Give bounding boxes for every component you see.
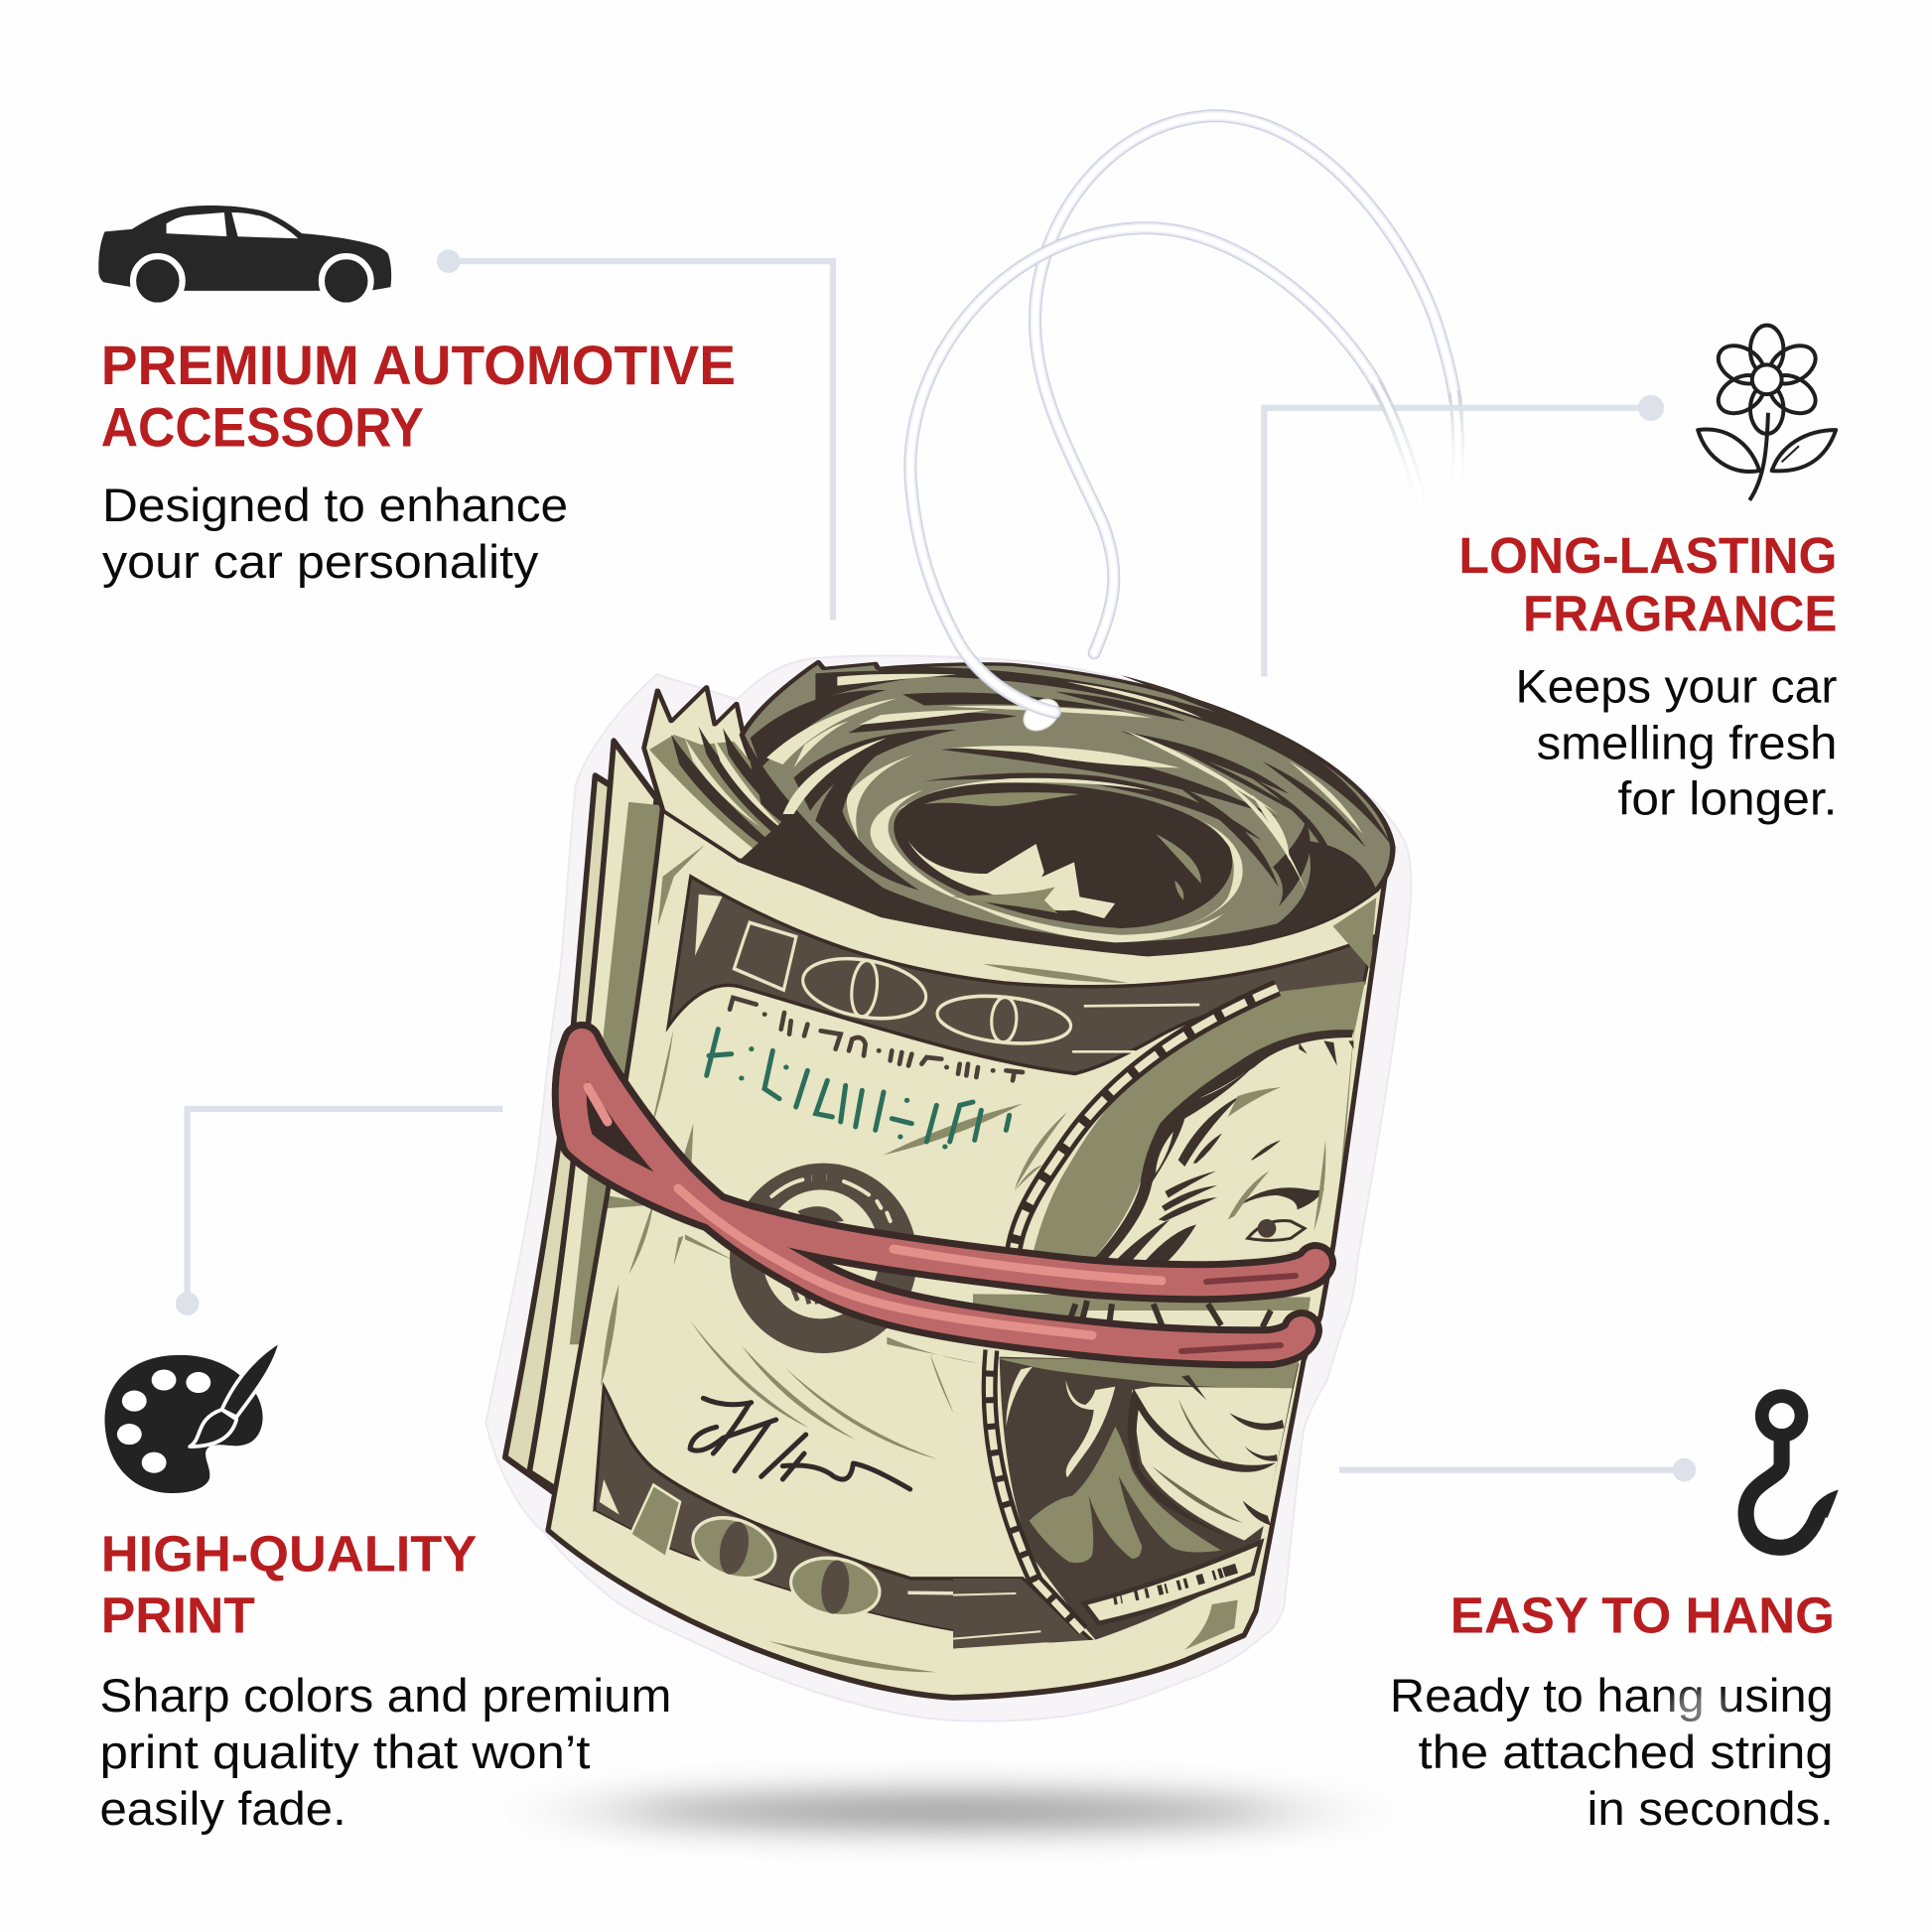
heading: high-quality print	[101, 1525, 477, 1643]
air freshener tag	[485, 655, 1420, 1727]
band red fill	[573, 1042, 1315, 1347]
roll dark streaks	[740, 667, 1393, 956]
text: fragrance description	[1516, 659, 1837, 824]
top "100" numerals	[734, 922, 1072, 1049]
heading: long-lasting fragrance	[1458, 527, 1837, 641]
folded back sheets	[505, 741, 663, 1504]
fan of bill edges	[644, 687, 804, 861]
bill front outline	[548, 805, 1386, 1698]
heading: premium automotive accessory: PREMIUM AUTOMOTIVE	[101, 334, 736, 396]
tag white border	[485, 655, 1411, 1722]
connector: easy to hang	[1339, 1461, 1693, 1478]
bill front	[550, 814, 1382, 1696]
text: print description: Sharp colors and premium	[100, 1669, 671, 1722]
corner shading right	[1333, 897, 1376, 969]
text: hang description: Ready to hang using	[1390, 1669, 1834, 1722]
text: automotive description: your car personality	[102, 535, 539, 588]
text: print description: print quality that won’t	[100, 1725, 590, 1778]
bottom "100" numerals	[630, 1485, 883, 1622]
swoosh left of medallion	[1015, 1112, 1067, 1189]
bottom cream corner	[953, 1638, 1098, 1649]
icon: car	[98, 206, 391, 291]
sliver shading	[952, 887, 1058, 913]
face	[1092, 1033, 1353, 1264]
brow	[1238, 1187, 1324, 1209]
olive swooshes	[601, 1030, 1042, 1459]
heading: premium automotive accessory: ACCESSORY	[101, 395, 424, 458]
text: hang description: in seconds.	[1587, 1782, 1834, 1835]
heading: long-lasting fragrance: FRAGRANCE	[1523, 585, 1837, 641]
note strip	[1084, 1542, 1261, 1623]
connector: high-quality print	[179, 1109, 502, 1312]
medallion dashed border top	[1013, 988, 1278, 1258]
text: print description: easily fade.	[100, 1782, 346, 1835]
text: print description	[100, 1669, 671, 1835]
text: fragrance description: smelling fresh	[1537, 716, 1837, 768]
band lines and glyphs	[1072, 1005, 1199, 1051]
text: automotive description	[102, 479, 568, 588]
olive strip under band	[996, 1358, 1299, 1388]
roll center hole	[894, 782, 1232, 928]
medallion dashed border bottom	[990, 1350, 1082, 1631]
fan shading	[649, 727, 848, 881]
text: fragrance description: Keeps your car	[1516, 659, 1837, 712]
icon: paint brush	[190, 1340, 281, 1447]
heading: premium automotive accessory	[101, 334, 736, 458]
text: fragrance description: for longer.	[1618, 771, 1837, 824]
car wheels	[133, 256, 371, 306]
text: hang description	[1390, 1669, 1834, 1835]
micro print glyphs	[730, 998, 1023, 1080]
between bands strip	[973, 1294, 1311, 1316]
portrait upper	[973, 981, 1365, 1328]
beard strokes	[1128, 1375, 1284, 1542]
rubber bands	[568, 1042, 1315, 1351]
cream sweep on roll edge	[982, 964, 1128, 983]
icon: flower	[1698, 326, 1836, 500]
band dark outlines	[573, 1042, 1315, 1347]
olive swash over serial	[884, 1104, 1023, 1155]
roll main shape	[740, 662, 1393, 955]
roll cream streaks	[766, 674, 1363, 942]
ground shadow	[462, 1785, 1436, 1837]
palette paint wells	[117, 1369, 210, 1473]
olive medallion ground	[1033, 981, 1365, 1261]
icon: paint palette	[104, 1355, 263, 1493]
text: hang description: the attached string	[1418, 1725, 1834, 1778]
band knot fill	[568, 1052, 650, 1186]
signature	[690, 1398, 910, 1489]
rolled bill top	[644, 662, 1393, 956]
inner paper sliver	[908, 841, 1115, 918]
teal serial marks	[707, 1030, 1010, 1147]
heading: easy to hang: EASY TO HANG	[1450, 1587, 1835, 1643]
dark band extension	[953, 1579, 1084, 1649]
middle area artwork	[601, 998, 1042, 1489]
icon: hook	[1746, 1396, 1839, 1548]
string back strand	[1035, 116, 1458, 653]
olive beard shadows	[1152, 1398, 1243, 1523]
hole olive highlights	[924, 792, 1201, 900]
olive leaves	[1030, 1427, 1221, 1563]
cream beard	[1132, 1387, 1293, 1541]
text fade artifact	[1668, 1691, 1727, 1729]
portrait lower	[953, 1349, 1299, 1650]
text: automotive description: Designed to enhance	[102, 479, 568, 531]
heading: high-quality print: HIGH-QUALITY	[101, 1525, 477, 1582]
hair curl	[1065, 1380, 1115, 1477]
band dark creases	[1181, 1276, 1296, 1351]
heading: long-lasting fragrance: LONG-LASTING	[1458, 527, 1837, 584]
top dark band	[668, 877, 1373, 1073]
side shading above band	[658, 845, 705, 926]
string front strand	[910, 228, 1427, 712]
car windows	[167, 212, 298, 238]
connector: long-lasting fragrance	[1264, 398, 1661, 676]
seal ring	[730, 1164, 917, 1353]
string hole	[1020, 693, 1063, 737]
connector: automotive accessory	[440, 252, 833, 620]
cream hair slits	[1156, 1069, 1249, 1173]
heading: high-quality print: PRINT	[101, 1587, 255, 1643]
eye	[1248, 1219, 1305, 1240]
band highlights	[588, 1087, 1162, 1335]
hair outline and strands	[1092, 1030, 1353, 1263]
bottom dark band	[595, 1387, 1094, 1643]
bottom band lines	[907, 1590, 953, 1595]
dark coat	[1000, 1357, 1299, 1640]
portrait shading	[1228, 1087, 1325, 1231]
